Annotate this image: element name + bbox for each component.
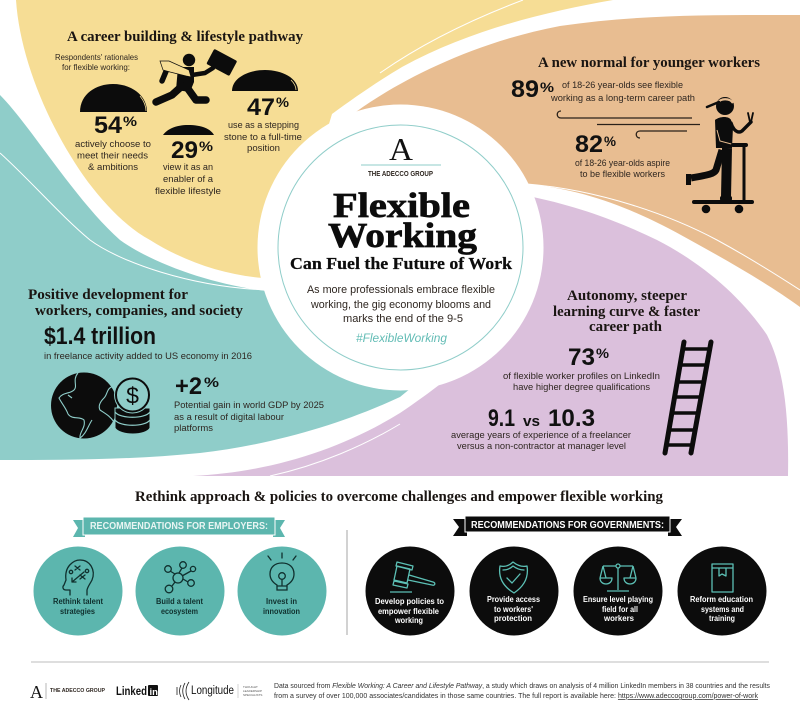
stat: 82 percent: % bbox=[604, 133, 617, 149]
logo wordmark: THE ADECCO GROUP bbox=[368, 169, 433, 178]
intro text: marks the end of the 9-5 bbox=[343, 313, 463, 325]
logo: The Adecco Group bbox=[30, 682, 105, 702]
stat: plus 2 percent: Potential gain in world GDP by 2025 bbox=[174, 400, 324, 411]
intro text bbox=[307, 284, 495, 325]
icon: head with strategy marks bbox=[63, 560, 93, 595]
card: level playing field: workers bbox=[603, 614, 635, 623]
icon: globe and coins: $ bbox=[126, 382, 139, 408]
text: data source note bbox=[274, 681, 770, 700]
stat: 47 percent: 47 bbox=[247, 94, 275, 121]
subtitle: Can Fuel the Future of Work bbox=[290, 254, 513, 273]
panel: career building and lifestyle pathway background bbox=[16, 0, 613, 278]
card: reform education: systems and bbox=[701, 605, 744, 614]
card: develop policies: working bbox=[394, 616, 423, 625]
stat: 1.4 trillion: in freelance activity added to US economy in 2016 bbox=[44, 351, 252, 362]
text: respondents' rationales: for flexible working: bbox=[62, 63, 130, 72]
card: reform education: training bbox=[709, 614, 735, 623]
card: build a talent ecosystem: Build a talent bbox=[156, 597, 203, 606]
heading: positive development: workers, companies, and society bbox=[35, 303, 243, 319]
heading: autonomy: career path bbox=[589, 319, 663, 335]
logo: LinkedIn: Linked bbox=[116, 684, 147, 698]
title bbox=[328, 186, 478, 255]
logo: The Adecco Group: THE ADECCO GROUP bbox=[50, 688, 105, 694]
panel: positive development background bbox=[0, 95, 411, 460]
icon: gavel bbox=[390, 562, 435, 592]
logo: Longitude: SPECIALISTS bbox=[243, 693, 262, 697]
panel: central title circle bbox=[258, 104, 544, 390]
stat: 29 percent: view it as an bbox=[163, 162, 213, 173]
card: develop policies: Develop policies to bbox=[375, 597, 444, 606]
card: reform education bbox=[678, 546, 766, 636]
stat: plus 2 percent: platforms bbox=[174, 423, 213, 434]
text: respondents' rationales bbox=[55, 53, 138, 72]
icon: speed lines bbox=[557, 111, 700, 138]
heading: positive development bbox=[28, 287, 243, 319]
icon: running businessman bbox=[156, 49, 237, 102]
heading: autonomy: learning curve & faster bbox=[553, 304, 700, 320]
intro text: As more professionals embrace flexible bbox=[307, 284, 495, 296]
stat: 54 percent: 54 bbox=[94, 112, 123, 139]
stat: 9.1 vs 10.3: versus a non-contractor at manager level bbox=[457, 441, 626, 452]
stat: 1.4 trillion: $1.4 trillion bbox=[44, 323, 156, 350]
stat: 73 percent: have higher degree qualifications bbox=[513, 382, 650, 393]
card: level playing field bbox=[574, 546, 662, 636]
logo: Longitude: THOUGHT bbox=[243, 685, 258, 689]
logo: The Adecco Group: A bbox=[30, 682, 43, 702]
card: build a talent ecosystem bbox=[136, 546, 224, 636]
icon: book bbox=[712, 564, 733, 592]
stat: plus 2 percent: +2 bbox=[175, 373, 202, 400]
stat: 54 percent: & ambitions bbox=[88, 162, 138, 173]
text: respondents' rationales: Respondents' rationales bbox=[55, 53, 138, 62]
panel: younger workers background bbox=[353, 15, 800, 307]
logo: Longitude: Longitude bbox=[191, 685, 234, 697]
stat: 29 percent: % bbox=[199, 138, 214, 154]
card: workers' protection: protection bbox=[494, 614, 532, 623]
card: invest in innovation: Invest in bbox=[266, 597, 297, 606]
hashtag: #FlexibleWorking bbox=[356, 333, 448, 345]
text: data source note: from a survey of over 100,000 associates/candidates in those same countries. The full report is available here: https://www.adeccogroup.com/power-of-work bbox=[274, 691, 758, 700]
icon: ladder bbox=[665, 342, 711, 453]
stat: 9.1 vs 10.3 bbox=[451, 405, 632, 452]
heading: autonomy: Autonomy, steeper bbox=[567, 288, 687, 304]
logo: Longitude: LEADERSHIP bbox=[243, 689, 262, 693]
icon: Adecco logo A: A bbox=[389, 131, 413, 167]
stat: 29 percent: flexible lifestyle bbox=[155, 186, 221, 197]
banner: recommendations for employers bbox=[73, 517, 285, 537]
card: develop policies: empower flexible bbox=[378, 607, 440, 616]
title: Working bbox=[328, 216, 478, 255]
icon: shield with check bbox=[500, 562, 527, 593]
stat: 54 percent bbox=[75, 84, 151, 173]
stat: 47 percent: position bbox=[247, 143, 280, 154]
icon: light bulb bbox=[268, 553, 296, 590]
card: workers' protection: to workers' bbox=[494, 605, 533, 614]
logo: Longitude bbox=[177, 682, 262, 700]
stat: 9.1 vs 10.3: vs bbox=[523, 413, 540, 430]
stat: 54 percent: % bbox=[123, 113, 138, 129]
stat: 47 percent: use as a stepping bbox=[228, 120, 299, 131]
logo wordmark bbox=[361, 165, 441, 178]
stat: 73 percent: % bbox=[596, 345, 610, 361]
panel: autonomy and career path background bbox=[193, 197, 788, 476]
stat: plus 2 percent: as a result of digital labour bbox=[174, 412, 285, 423]
stat: plus 2 percent: % bbox=[204, 374, 220, 390]
stat: 54 percent: meet their needs bbox=[77, 150, 148, 162]
stat: 82 percent bbox=[575, 131, 670, 180]
logo: LinkedIn: in bbox=[150, 687, 158, 698]
stat: 89 percent: % bbox=[540, 79, 555, 95]
stat: 9.1 vs 10.3: 10.3 bbox=[548, 405, 595, 432]
stat: 47 percent: % bbox=[276, 94, 290, 110]
stat: plus 2 percent bbox=[174, 373, 324, 434]
stat: 73 percent: 73 bbox=[568, 344, 595, 371]
stat: 82 percent: to be flexible workers bbox=[580, 169, 665, 180]
stat: 73 percent: of flexible worker profiles on LinkedIn bbox=[503, 371, 660, 382]
card: workers' protection: Provide access bbox=[487, 595, 540, 604]
card: level playing field: field for all bbox=[602, 605, 638, 614]
card: workers' protection bbox=[470, 546, 558, 636]
icon: globe and coins bbox=[51, 372, 151, 438]
stat: 73 percent bbox=[503, 344, 660, 393]
icon: network nodes bbox=[165, 562, 196, 593]
stat: 47 percent bbox=[224, 70, 302, 154]
stat: 82 percent: 82 bbox=[575, 131, 603, 158]
banner: recommendations for employers: RECOMMENDATIONS FOR EMPLOYERS: bbox=[90, 521, 268, 532]
stat: 47 percent: stone to a full-time bbox=[224, 132, 302, 143]
text: data source note: Data sourced from Flexible Working: A Career and Lifestyle Pathway, a study which draws on analysis of 4 million LinkedIn members in 38 countries and the results bbox=[274, 681, 770, 690]
card: rethink talent strategies: strategies bbox=[60, 607, 96, 616]
stat: 89 percent: working as a long-term career path bbox=[550, 93, 695, 104]
heading: younger workers: A new normal for younger workers bbox=[538, 55, 760, 71]
stat: 54 percent: actively choose to bbox=[75, 139, 151, 150]
card: level playing field: Ensure level playing bbox=[583, 595, 653, 604]
stat: 89 percent: 89 bbox=[511, 76, 539, 103]
icon: worker on scooter bbox=[686, 97, 753, 213]
stat: 1.4 trillion bbox=[44, 323, 252, 362]
intro text: working, the gig economy blooms and bbox=[310, 299, 491, 311]
title: Flexible bbox=[333, 186, 470, 225]
stat: 89 percent bbox=[511, 76, 695, 104]
card: invest in innovation: innovation bbox=[263, 607, 300, 616]
stat: 89 percent: of 18-26 year-olds see flexible bbox=[562, 80, 683, 91]
banner: recommendations for governments bbox=[453, 516, 682, 536]
stat: 29 percent: enabler of a bbox=[163, 174, 214, 185]
icon: scales bbox=[600, 564, 636, 591]
banner: recommendations for governments: RECOMMENDATIONS FOR GOVERNMENTS: bbox=[471, 520, 664, 531]
heading: career pathway: A career building & lifestyle pathway bbox=[67, 29, 303, 45]
stat: 9.1 vs 10.3: 9.1 bbox=[488, 405, 515, 432]
stat: 82 percent: of 18-26 year-olds aspire bbox=[575, 158, 670, 169]
heading: rethink approach: Rethink approach & policies to overcome challenges and empower flexible working bbox=[135, 489, 663, 505]
card: invest in innovation bbox=[238, 546, 326, 636]
card: rethink talent strategies: Rethink talent bbox=[53, 597, 103, 606]
card: reform education: Reform education bbox=[690, 595, 753, 604]
heading: positive development: Positive development for bbox=[28, 287, 188, 303]
heading: autonomy bbox=[553, 288, 700, 335]
card: rethink talent strategies bbox=[34, 546, 122, 636]
card: build a talent ecosystem: ecosystem bbox=[161, 607, 198, 616]
card: develop policies bbox=[366, 546, 454, 636]
stat: 9.1 vs 10.3: average years of experience of a freelancer bbox=[451, 430, 632, 441]
stat: 29 percent: 29 bbox=[171, 137, 198, 164]
stat: 29 percent bbox=[155, 125, 221, 197]
